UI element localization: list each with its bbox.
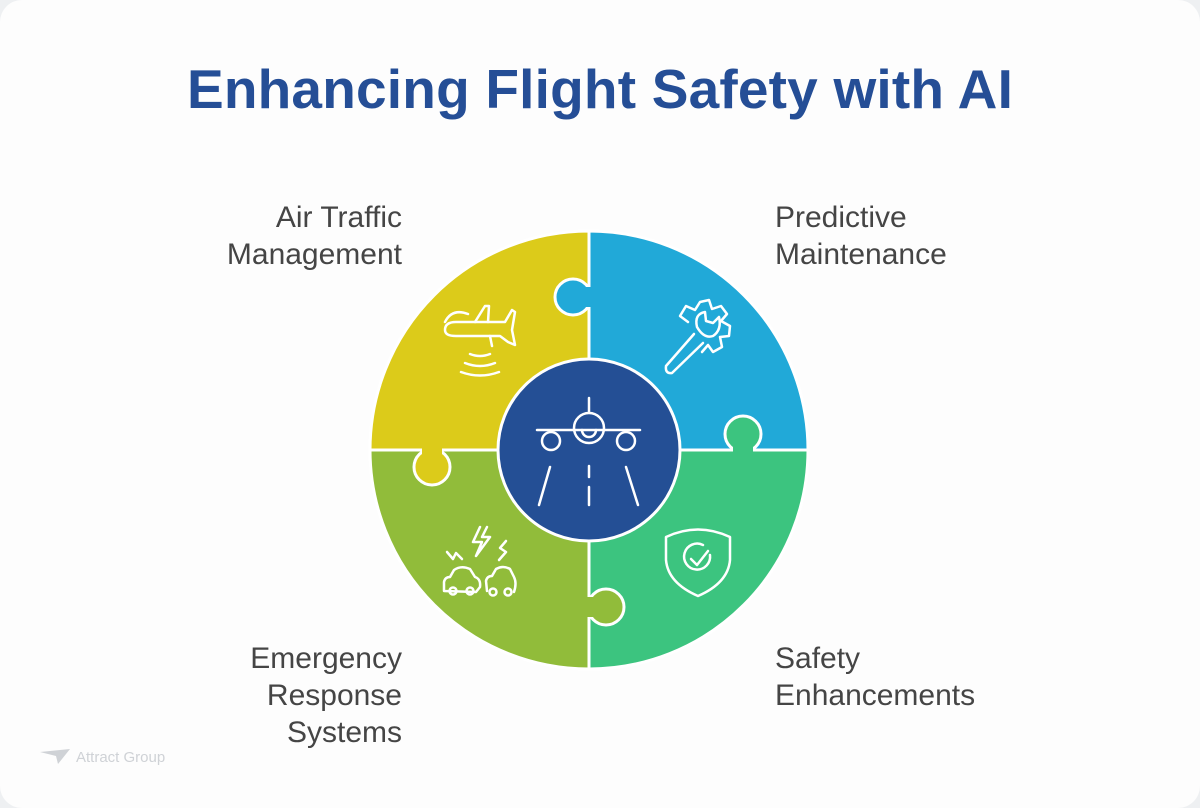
- label: safety enhancements: Enhancements: [775, 679, 975, 712]
- quadrant: lime: [370, 450, 589, 669]
- logo: attract group: Attract Group: [76, 749, 165, 766]
- quadrant: blue: [589, 231, 808, 450]
- quadrant: green: [589, 450, 808, 669]
- knob necks: [422, 287, 753, 617]
- label: predictive maintenance: Maintenance: [775, 238, 947, 271]
- label: predictive maintenance: [775, 201, 947, 271]
- icon: plane with signal: [445, 306, 515, 376]
- icon: gear and wrench: [666, 300, 730, 373]
- label: air traffic management: [227, 201, 402, 271]
- label: air traffic management: Management: [227, 238, 402, 271]
- icon: airplane on runway: [537, 398, 640, 505]
- label: emergency response systems: Emergency: [250, 642, 402, 675]
- quadrant: yellow: [370, 231, 589, 450]
- knob: yellow into lime: [414, 449, 450, 485]
- icon: cars collision: [444, 527, 516, 596]
- label: emergency response systems: Response: [267, 679, 402, 712]
- icon: shield with check: [666, 530, 730, 596]
- knob: green into blue: [725, 416, 761, 452]
- label: air traffic management: Air Traffic: [276, 201, 402, 234]
- label: emergency response systems: [250, 642, 402, 749]
- label: safety enhancements: [775, 642, 975, 712]
- knob: lime into green: [588, 589, 624, 625]
- label: predictive maintenance: Predictive: [775, 201, 907, 234]
- title: Enhancing Flight Safety with AI: [187, 58, 1013, 120]
- label: safety enhancements: Safety: [775, 642, 860, 675]
- knob: blue into yellow: [555, 279, 591, 315]
- center circle: [498, 359, 680, 541]
- label: emergency response systems: Systems: [287, 716, 402, 749]
